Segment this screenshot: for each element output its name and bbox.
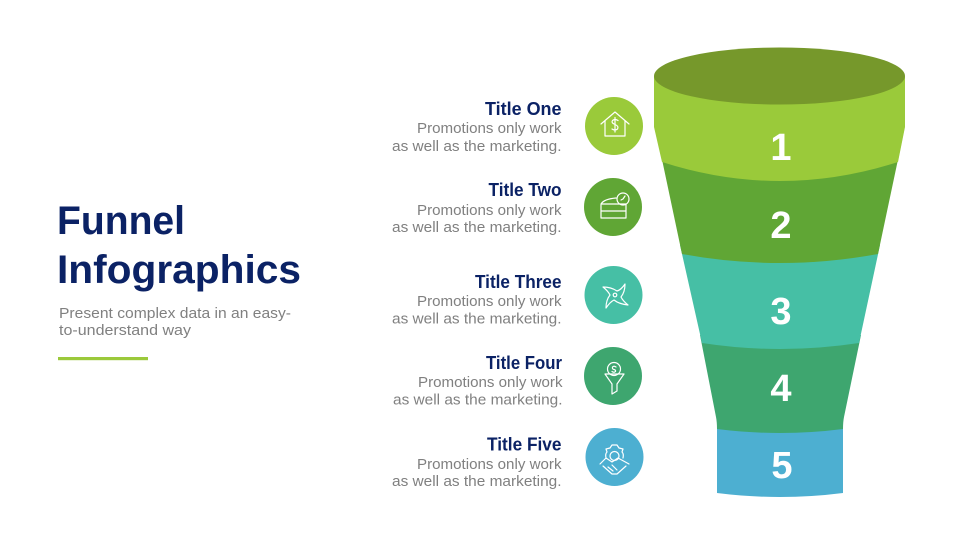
icon: cake with clock — [601, 193, 629, 218]
description: Promotions only work — [417, 457, 562, 473]
segment 1 — [654, 76, 905, 181]
description — [392, 294, 562, 328]
segment 2: 2 — [770, 205, 792, 247]
segment 5: 5 — [771, 445, 793, 487]
segment 5 — [717, 425, 843, 497]
item 4 — [393, 347, 642, 408]
title: Infographics — [57, 248, 301, 292]
description — [392, 121, 562, 155]
segment 2 — [660, 150, 900, 263]
funnel opening — [654, 48, 905, 104]
accent line — [58, 357, 148, 360]
item 1 — [392, 97, 643, 155]
circle — [585, 97, 643, 155]
heading: Title Three — [475, 272, 562, 292]
segment 3 — [680, 245, 880, 349]
circle — [584, 266, 642, 324]
icon: handshake with gear — [600, 445, 629, 474]
description: as well as the marketing. — [392, 220, 562, 236]
circle — [586, 428, 644, 486]
description — [392, 203, 562, 236]
segment 1: 1 — [770, 127, 792, 169]
description: as well as the marketing. — [392, 474, 562, 490]
subtitle: Present complex data in an easy- — [59, 305, 291, 322]
heading: Title Two — [488, 180, 562, 200]
description: as well as the marketing. — [392, 139, 562, 155]
subtitle — [59, 305, 291, 339]
item 5 — [392, 428, 644, 490]
circle — [584, 178, 642, 236]
description — [392, 457, 562, 490]
segment 4 — [700, 335, 861, 433]
circle — [584, 347, 642, 405]
subtitle: to-understand way — [59, 322, 192, 339]
item 3 — [392, 266, 642, 328]
icon: shuriken — [603, 284, 628, 308]
segment 3: 3 — [770, 291, 792, 333]
description: as well as the marketing. — [392, 312, 562, 328]
title — [57, 199, 301, 292]
description: Promotions only work — [418, 375, 563, 391]
description: as well as the marketing. — [393, 392, 562, 408]
heading: Title One — [485, 99, 562, 119]
segment 4: 4 — [770, 368, 792, 410]
heading: Title Five — [487, 434, 562, 454]
heading: Title Four — [486, 353, 562, 373]
item 2 — [392, 178, 642, 236]
description: Promotions only work — [417, 203, 562, 219]
title: Funnel — [57, 199, 185, 243]
description — [393, 375, 563, 408]
icon: house with dollar — [601, 112, 629, 136]
description: Promotions only work — [417, 294, 562, 310]
funnel — [654, 48, 905, 497]
icon: funnel with dollar — [605, 362, 624, 394]
description: Promotions only work — [417, 121, 562, 137]
